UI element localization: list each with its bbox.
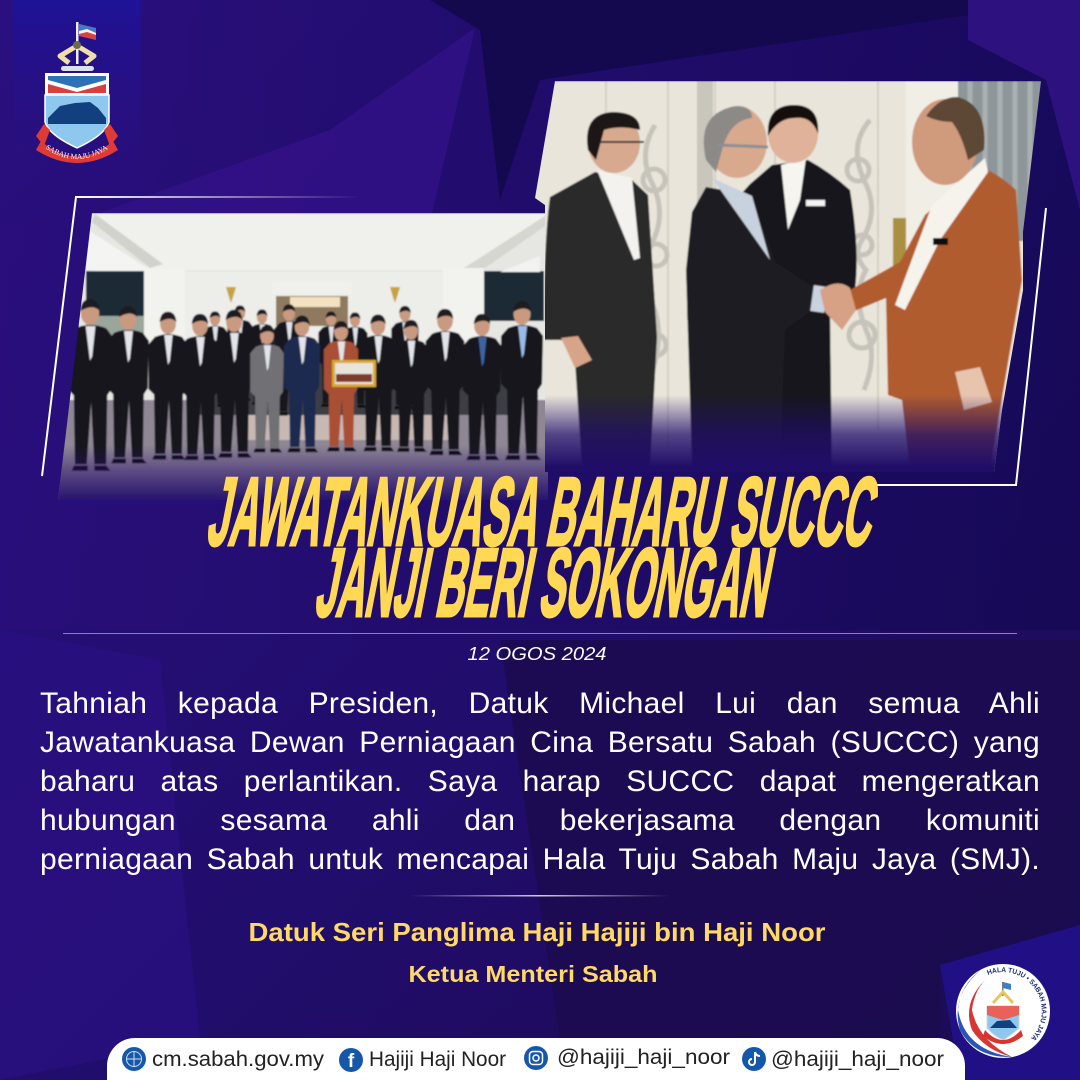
signatory role: Ketua Menteri Sabah <box>408 961 658 987</box>
door carvings <box>643 120 875 390</box>
icon: instagram <box>524 1046 548 1070</box>
icon: website <box>122 1047 146 1071</box>
badge: Hala Tuju Sabah Maju Jaya <box>956 964 1050 1058</box>
crest ribbon: SABAH MAJU JAYA <box>46 145 108 160</box>
group: front row <box>67 299 543 471</box>
instagram text: @hajiji_haji_noor <box>557 1046 730 1069</box>
body message: baharu atas perlantikan. Saya harap SUCCC dapat mengeratkan <box>40 765 1040 798</box>
frame line: right photo <box>870 208 1046 485</box>
website text: cm.sabah.gov.my <box>152 1048 325 1071</box>
crest ribbon <box>36 124 118 163</box>
handshake <box>820 283 856 330</box>
tiktok text: @hajiji_haji_noor <box>771 1048 944 1071</box>
date: 12 OGOS 2024 <box>468 644 606 664</box>
framed picture held up <box>332 360 376 387</box>
icon: facebook <box>339 1048 363 1072</box>
title <box>201 457 886 637</box>
body message: hubungan sesama ahli dan bekerjasama dengan komuniti <box>40 804 1040 837</box>
body message <box>40 687 1040 876</box>
frame line: left photo <box>42 196 360 476</box>
ornament divider <box>410 895 670 896</box>
icon: tiktok <box>742 1047 766 1071</box>
facebook text: Hajiji Haji Noor <box>369 1048 506 1071</box>
badge: Hala Tuju Sabah Maju Jaya: HALA TUJU • SABAH MAJU JAYA <box>986 967 1047 1040</box>
photo: handshake <box>525 81 1050 481</box>
person: man with dark suit, back <box>742 104 858 462</box>
person: man in dark blazer, left <box>543 112 657 470</box>
crest: Sabah state arms <box>36 22 118 163</box>
social bar <box>107 1038 965 1080</box>
body message: Jawatankuasa Dewan Perniagaan Cina Bersatu Sabah (SUCCC) yang <box>40 726 1040 759</box>
photo: group portrait <box>40 213 570 503</box>
divider <box>63 633 1017 634</box>
group: back row <box>202 304 419 416</box>
body message: perniagaan Sabah untuk mencapai Hala Tuju Sabah Maju Jaya (SMJ). <box>40 843 1040 876</box>
person: man in black blazer shaking hands <box>686 106 828 470</box>
body message: Tahniah kepada Presiden, Datuk Michael Lui dan semua Ahli <box>40 687 1040 720</box>
signatory name: Datuk Seri Panglima Haji Hajiji bin Haji Noor <box>248 917 826 947</box>
person: man in orange blazer <box>850 97 1022 470</box>
icon: flag <box>79 24 96 40</box>
icon: facebook: f <box>348 1051 355 1072</box>
